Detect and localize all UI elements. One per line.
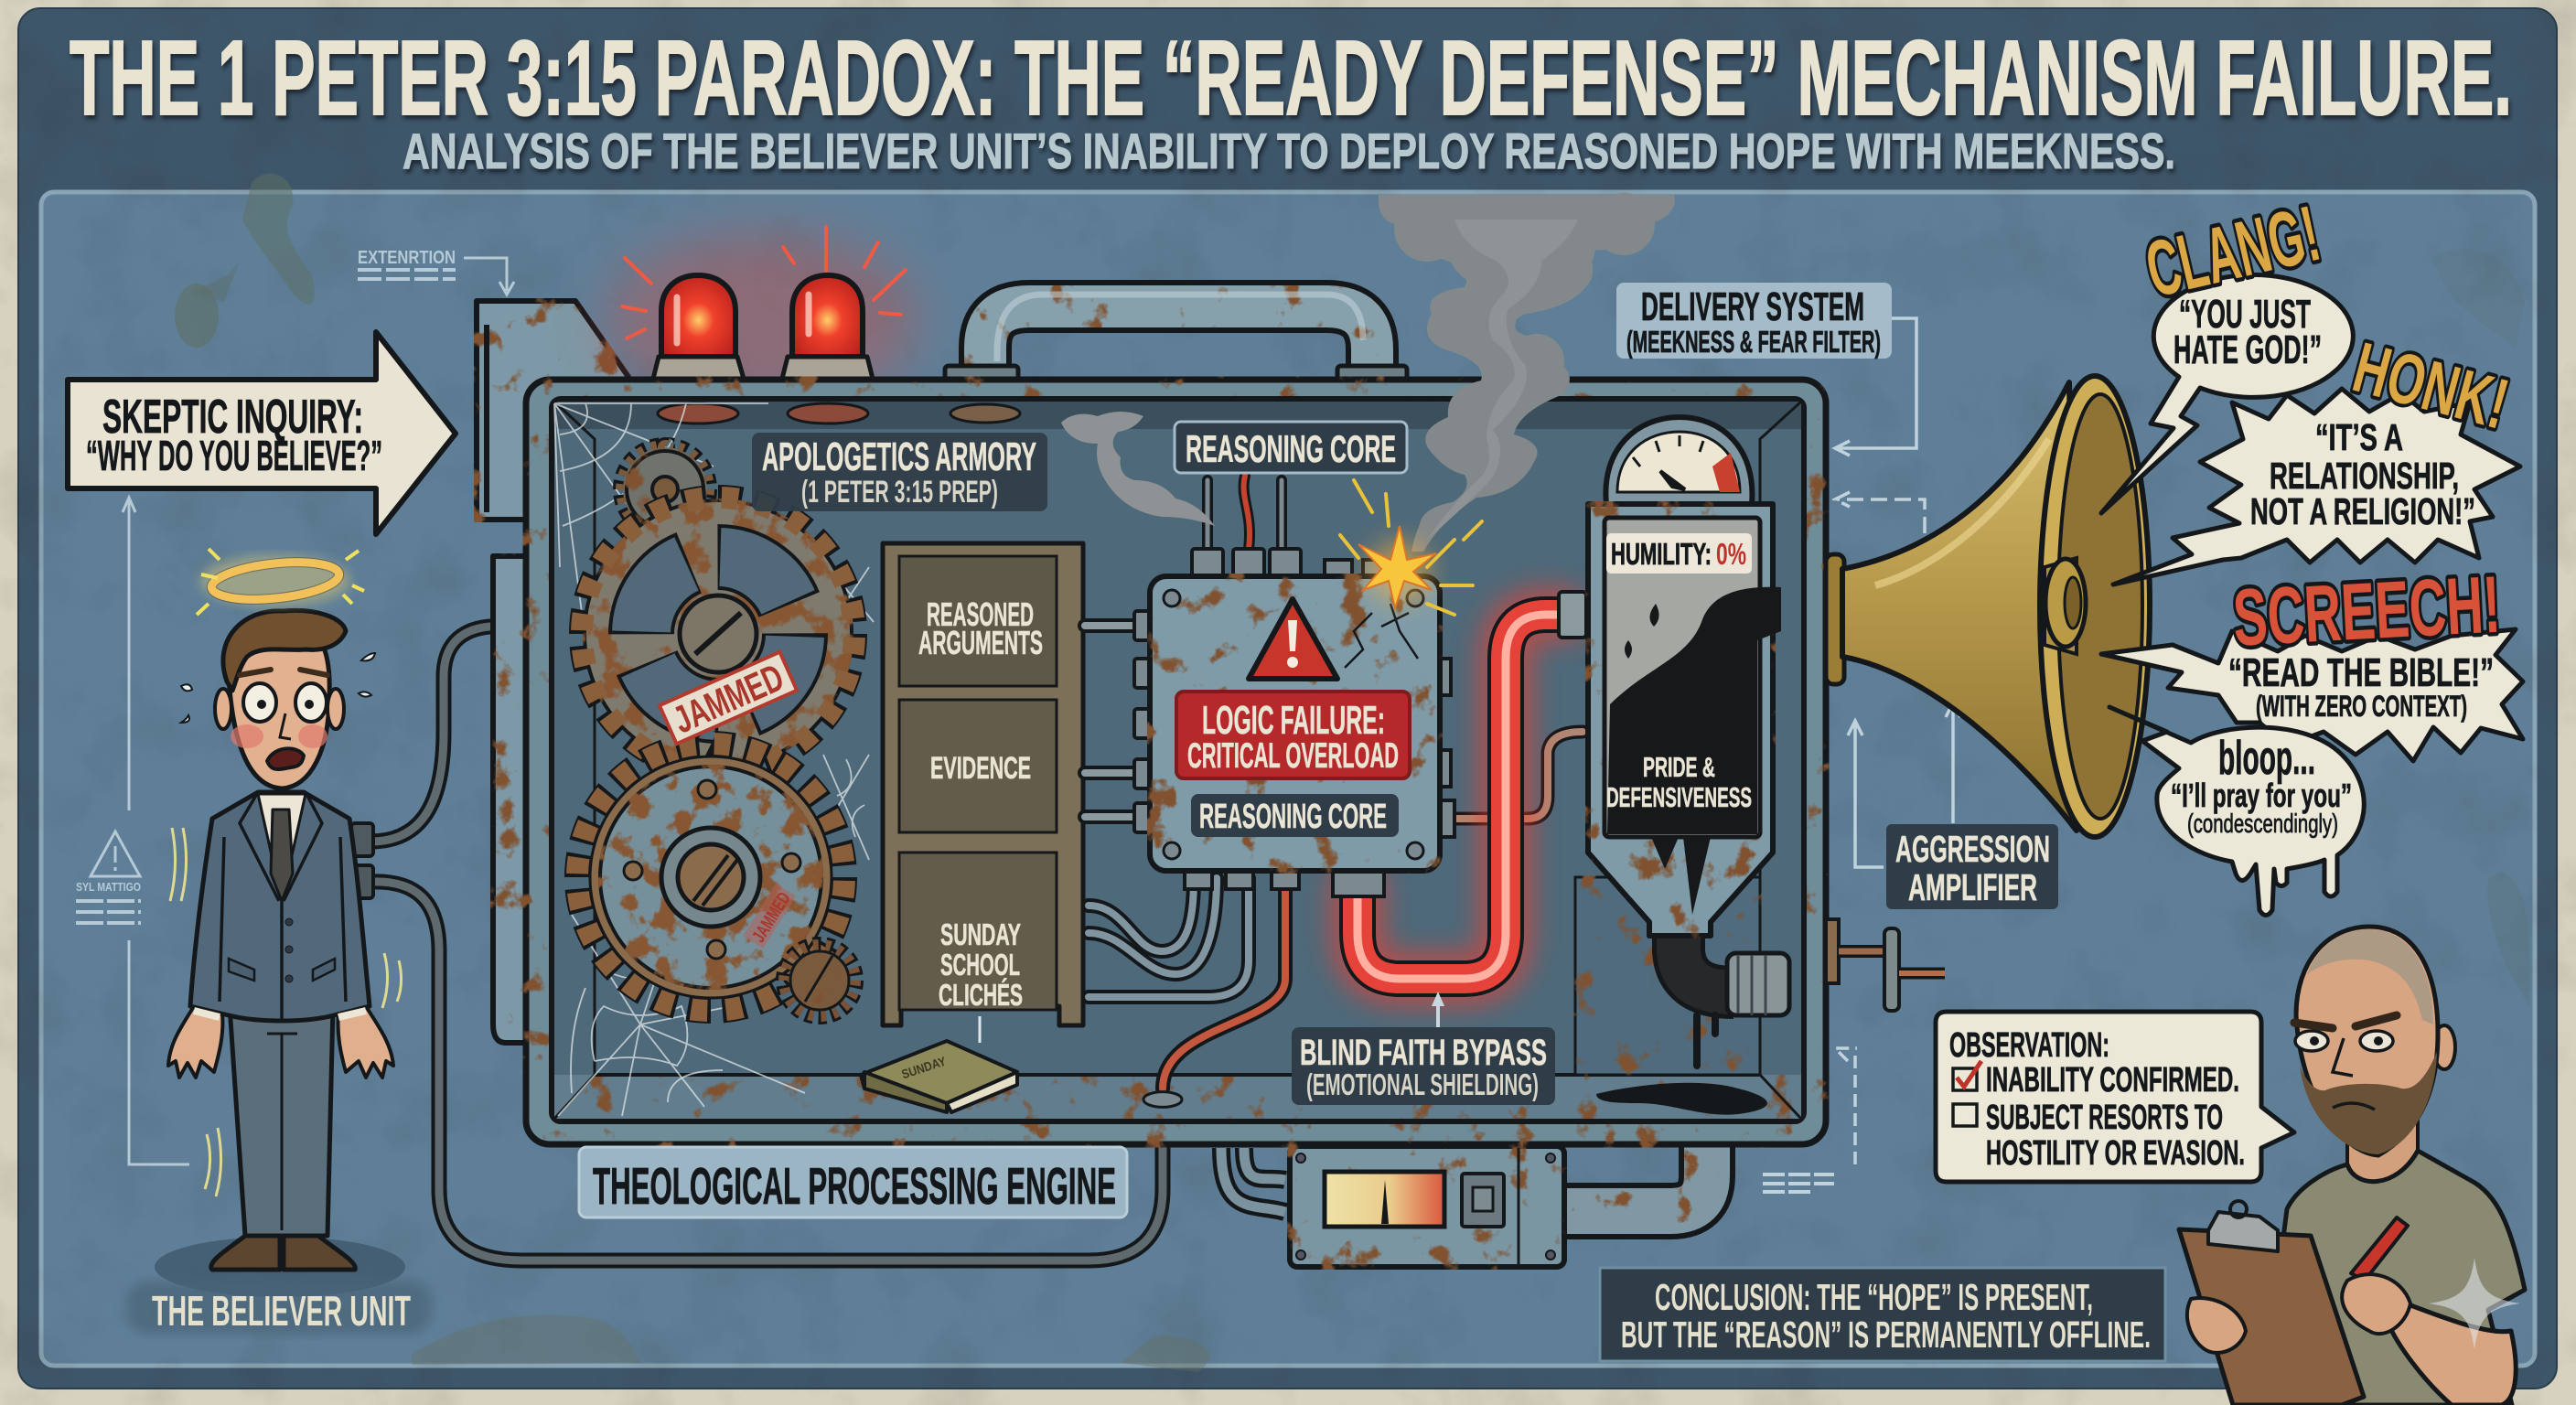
label: apologetics armory: (1 PETER 3:15 PREP)	[801, 475, 998, 509]
sweat marks	[181, 653, 375, 723]
sound bubble: clang	[2101, 189, 2353, 513]
engine side brackets	[477, 301, 628, 1043]
eyes and brows	[2294, 1015, 2397, 1051]
figure: observer with clipboard	[2179, 927, 2525, 1405]
sound bubble: bloop: “I’ll pray for you”	[2171, 777, 2352, 814]
conclusion banner	[1600, 1268, 2165, 1361]
hands and pen	[2187, 1217, 2410, 1353]
sound bubble: screech	[2101, 559, 2523, 761]
figure shadow	[155, 1237, 405, 1297]
top pipe	[945, 295, 1407, 381]
head	[229, 622, 329, 788]
tank casing	[1588, 504, 1773, 936]
label: aggression amplifier: AMPLIFIER	[1908, 866, 2037, 908]
tank text: DEFENSIVENESS	[1606, 781, 1752, 813]
sound bubble: clang: “YOU JUST	[2179, 292, 2311, 337]
theological processing engine body	[526, 380, 1826, 1144]
logic failure plate: LOGIC FAILURE:	[1202, 698, 1385, 743]
sound bubble: bloop: bloop...	[2218, 732, 2315, 785]
label: blind faith bypass	[1292, 992, 1555, 1105]
observation callout: SUBJECT RESORTS TO	[1986, 1099, 2223, 1137]
arrow: skeptic inquiry: “WHY DO YOU BELIEVE?”	[86, 432, 382, 479]
hose and valve	[1679, 928, 1789, 1066]
cables from believer to engine	[351, 627, 1163, 1260]
observation callout: HOSTILITY OR EVASION.	[1986, 1134, 2245, 1173]
label: reasoning core	[1175, 422, 1407, 473]
oil	[1607, 587, 1781, 834]
head	[2433, 1025, 2455, 1069]
observation callout: OBSERVATION:	[1949, 1026, 2109, 1065]
mouth	[267, 748, 304, 769]
eyes	[243, 683, 276, 722]
sound bubble: clang: CLANG!	[2139, 189, 2327, 315]
engine interior	[552, 399, 1804, 1121]
warning lights	[606, 227, 918, 407]
shelf text: sunday school cliches: SUNDAY	[940, 917, 1021, 951]
stubble hair	[2307, 929, 2433, 1024]
label: delivery system: DELIVERY SYSTEM	[1641, 284, 1864, 329]
label: aggression amplifier: AGGRESSION	[1895, 828, 2050, 870]
hands	[168, 1006, 393, 1078]
shelf text: reasoned arguments	[918, 595, 1043, 661]
label: the believer unit	[127, 1281, 431, 1335]
shelf text: evidence: EVIDENCE	[930, 751, 1031, 786]
small jammed stamp: JAMMED	[748, 889, 795, 946]
sound bubble: honk: “IT’S A	[2315, 416, 2403, 458]
book	[861, 1041, 1017, 1112]
tank text	[1606, 751, 1752, 813]
empty checkbox	[1953, 1104, 1977, 1126]
small top gear	[623, 447, 707, 531]
blueprint annotation: extention	[358, 248, 514, 295]
neon red bypass pipe	[1358, 592, 1586, 979]
blueprint annotation: left warning	[76, 498, 189, 1164]
suit jacket	[190, 792, 370, 1021]
trousers	[230, 1006, 333, 1236]
shelf text: sunday school cliches: SCHOOL	[940, 948, 1020, 981]
shelf text: reasoned arguments: REASONED	[927, 595, 1034, 633]
apologetics armory shelf	[883, 543, 1083, 1043]
engine outer frame	[526, 380, 1826, 1144]
label: aggression amplifier	[1886, 824, 2058, 909]
large lower gear	[577, 744, 844, 1011]
control box: logic failure	[1134, 549, 1454, 896]
blueprint annotation: left warning: SYL MATTIGO	[76, 880, 141, 894]
smoke: small plume	[1061, 412, 1215, 526]
label: blind faith bypass: BLIND FAITH BYPASS	[1300, 1033, 1547, 1073]
sound bubble: bloop: (condescendingly)	[2187, 810, 2338, 839]
observation callout	[1936, 1012, 2294, 1182]
figure: the believer unit	[155, 549, 405, 1297]
label: apologetics armory	[752, 433, 1047, 511]
tank text: PRIDE &	[1643, 751, 1715, 783]
wires and hoses around control box	[1085, 476, 1583, 1107]
shoes	[211, 1236, 355, 1270]
small jammed stamp	[743, 884, 797, 949]
shirt and tie	[258, 794, 306, 901]
book: SUNDAY	[899, 1054, 948, 1081]
conclusion banner: CONCLUSION: THE “HOPE” IS PRESENT,	[1655, 1276, 2093, 1318]
label: theological processing engine	[579, 1147, 1127, 1217]
label: apologetics armory: APOLOGETICS ARMORY	[762, 434, 1036, 479]
logic failure plate: CRITICAL OVERLOAD	[1187, 736, 1399, 776]
conclusion banner: BUT THE “REASON” IS PERMANENTLY OFFLINE.	[1621, 1314, 2151, 1356]
label: theological processing engine: THEOLOGICAL PROCESSING ENGINE	[593, 1157, 1116, 1216]
label: blind faith bypass: (EMOTIONAL SHIELDING)	[1306, 1067, 1539, 1101]
lever at right of engine	[1826, 919, 1945, 1011]
smoke: large plume	[1379, 193, 1675, 552]
box ports	[1134, 549, 1454, 896]
shelf text: sunday school cliches: CLICHÉS	[939, 978, 1023, 1012]
arrow: skeptic inquiry: SKEPTIC INQUIRY:	[102, 391, 363, 444]
beard	[2300, 1052, 2437, 1154]
lower device pipes	[1221, 1143, 1707, 1212]
reasoning core plate: REASONING CORE	[1199, 798, 1387, 836]
lower device with meter	[1290, 1146, 1564, 1267]
label: the believer unit: THE BELIEVER UNIT	[152, 1287, 411, 1335]
nose and mouth	[2333, 1038, 2375, 1110]
warning triangle	[1249, 599, 1337, 679]
callout arrows to engine	[1763, 318, 1960, 1192]
small lower gear	[785, 946, 854, 1015]
label: delivery system: (MEEKNESS & FEAR FILTER)	[1626, 325, 1881, 359]
clipboard	[2179, 1201, 2364, 1405]
observation callout: INABILITY CONFIRMED.	[1986, 1061, 2239, 1099]
shelf text: reasoned arguments: ARGUMENTS	[918, 624, 1043, 661]
checked checkbox	[1953, 1061, 1981, 1090]
hair	[223, 610, 346, 691]
logic failure plate	[1176, 692, 1410, 778]
watermark star	[2429, 1258, 2520, 1349]
large upper gear	[582, 498, 854, 770]
gauge	[1605, 417, 1752, 504]
sound bubble: honk	[2113, 327, 2520, 585]
amplifier horn	[1826, 376, 2150, 837]
sound bubble: bloop	[2109, 707, 2364, 915]
shelf text: sunday school cliches	[939, 917, 1023, 1012]
blueprint annotation: extention: EXTENRTION	[358, 248, 456, 268]
label: reasoning core: REASONING CORE	[1186, 427, 1396, 470]
humility readout: 0%	[1716, 537, 1746, 571]
jammed stamp: JAMMED	[667, 655, 789, 742]
neck	[2345, 1120, 2420, 1180]
shirt	[2269, 1151, 2525, 1405]
jammed stamp	[660, 652, 798, 745]
sound bubble: clang: HATE GOD!”	[2174, 327, 2322, 372]
reasoning core plate	[1191, 794, 1399, 837]
gears	[577, 447, 854, 1015]
halo	[197, 549, 364, 615]
spark	[1340, 480, 1482, 615]
tank: pride and defensiveness	[1588, 417, 1789, 1115]
arrow: skeptic inquiry	[68, 332, 456, 534]
sound bubble: honk: RELATIONSHIP,	[2270, 455, 2459, 497]
humility readout: HUMILITY:	[1611, 537, 1712, 571]
puddle	[1596, 1083, 1767, 1115]
forearm	[2388, 1303, 2516, 1405]
label: delivery system	[1616, 283, 1892, 359]
cobwebs	[554, 403, 874, 1116]
